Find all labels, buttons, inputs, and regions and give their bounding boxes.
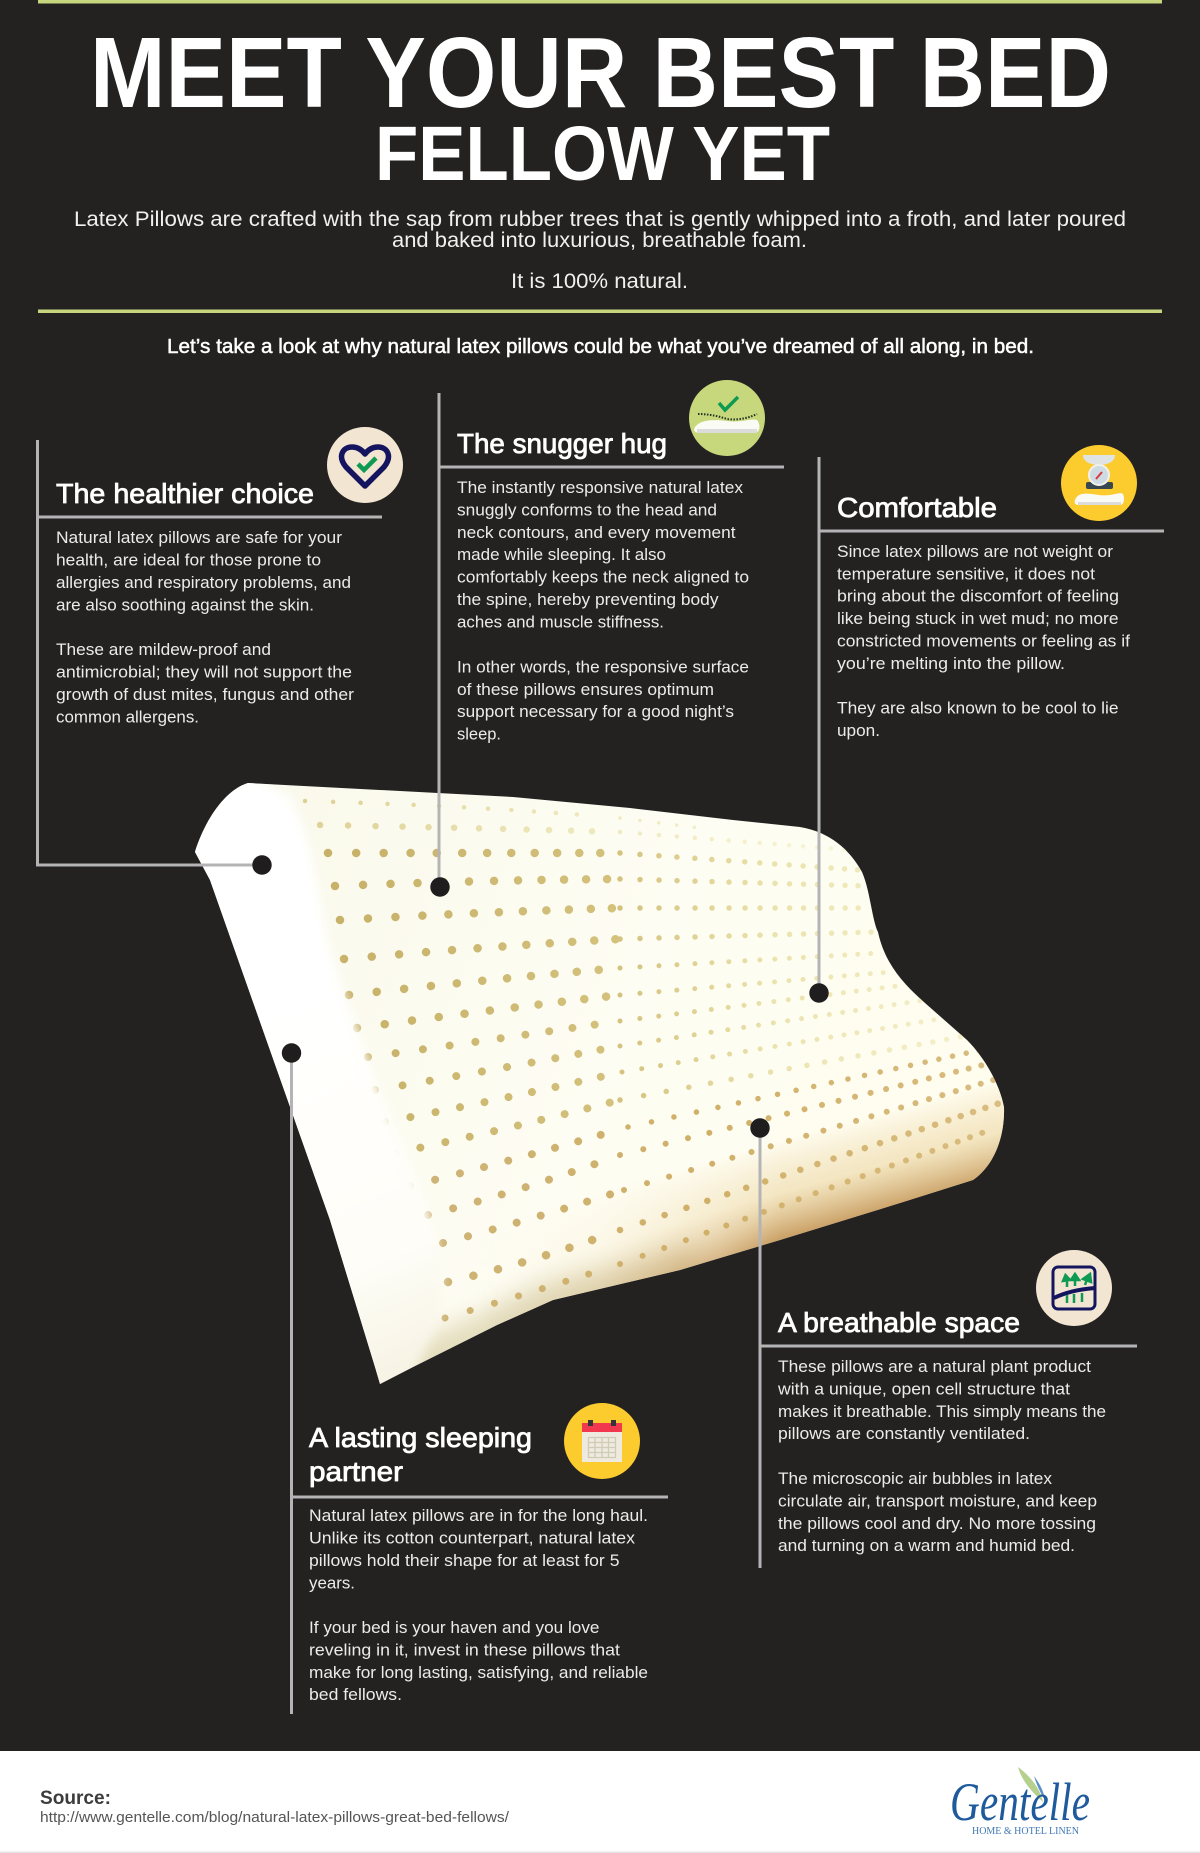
body text: In other words, the responsive surface [457, 658, 749, 676]
body text: The instantly responsive natural latex [457, 478, 744, 497]
body text: the spine, hereby preventing body [457, 590, 719, 609]
body text: with a unique, open cell structure that [777, 1380, 1070, 1398]
body text: pillows hold their shape for at least for 5 [309, 1551, 620, 1570]
panel: the snugger hug [439, 380, 784, 744]
panel: comfortable [819, 445, 1164, 740]
heading: A lasting sleeping [309, 1422, 532, 1453]
body text: pillows are constantly ventilated. [778, 1424, 1030, 1443]
title [90, 17, 1111, 197]
icon: heart with check [327, 427, 403, 503]
body text [309, 1506, 648, 1704]
body text [777, 1357, 1106, 1555]
body text [837, 542, 1130, 740]
body text: health, are ideal for those prone to [56, 550, 321, 570]
body text: made while sleeping. It also [457, 545, 666, 564]
body text: neck contours, and every movement [457, 523, 736, 542]
heading: The snugger hug [457, 428, 667, 459]
body text: upon. [837, 721, 880, 740]
intro text: It is 100% natural. [511, 269, 688, 293]
body text: These are mildew-proof and [56, 640, 271, 659]
leader line: lasting partner [290, 1053, 293, 1714]
intro text: and baked into luxurious, breathable foam. [392, 228, 807, 252]
body text: antimicrobial; they will not support the [56, 662, 352, 682]
body text: aches and muscle stiffness. [457, 612, 664, 632]
body text: temperature sensitive, it does not [837, 564, 1095, 584]
heading [309, 1422, 532, 1487]
body text: Natural latex pillows are safe for your [56, 528, 342, 547]
body text: Natural latex pillows are in for the long haul. [309, 1506, 648, 1525]
heading: Comfortable [837, 492, 997, 523]
leader line: snugger hug [438, 393, 440, 887]
body text: years. [309, 1574, 355, 1592]
title: MEET YOUR BEST BED [90, 17, 1111, 129]
body text: comfortably keeps the neck aligned to [457, 568, 749, 586]
body text [56, 528, 354, 726]
title: FELLOW YET [375, 111, 830, 197]
intro text: Latex Pillows are crafted with the sap from rubber trees that is gently whipped into a froth, and later poured [74, 207, 1126, 231]
body text: These pillows are a natural plant product [778, 1357, 1091, 1376]
source [40, 1788, 510, 1826]
body text: and turning on a warm and humid bed. [778, 1536, 1075, 1555]
source: Source: [40, 1788, 111, 1809]
body text: growth of dust mites, fungus and other [56, 685, 354, 704]
leader line: healthier choice [38, 440, 262, 865]
logo: Gentelle: Gentelle [950, 1772, 1090, 1832]
leader line: comfortable [818, 457, 820, 993]
heading: A breathable space [778, 1307, 1020, 1338]
leader line: breathable space [758, 1128, 762, 1568]
body text [457, 478, 749, 744]
body text: Unlike its cotton counterpart, natural latex [309, 1528, 636, 1548]
body text: The microscopic air bubbles in latex [778, 1469, 1053, 1488]
logo: Gentelle: HOME & HOTEL LINEN [972, 1826, 1079, 1837]
body text: are also soothing against the skin. [56, 596, 314, 614]
body text: snuggly conforms to the head and [457, 500, 717, 520]
pillow illustration [185, 775, 1020, 1400]
body text: allergies and respiratory problems, and [56, 573, 351, 592]
icon: calendar [564, 1403, 640, 1479]
body text: They are also known to be cool to lie [837, 698, 1118, 718]
body text: like being stuck in wet mud; no more [837, 609, 1118, 628]
body text: bring about the discomfort of feeling [837, 586, 1119, 606]
body text: Since latex pillows are not weight or [837, 542, 1113, 561]
panel: a breathable space [760, 1250, 1137, 1555]
subheading: Let’s take a look at why natural latex pillows could be what you’ve dreamed of all along, in bed. [167, 335, 1034, 358]
body text: make for long lasting, satisfying, and reliable [309, 1663, 648, 1682]
panel: a lasting sleeping partner [292, 1403, 668, 1704]
body text: makes it breathable. This simply means the [778, 1402, 1106, 1421]
body text: support necessary for a good night’s [457, 702, 734, 721]
panel: the healthier choice [37, 427, 403, 726]
footer [0, 1751, 1200, 1853]
body text: you’re melting into the pillow. [837, 654, 1065, 673]
icon: airflow [1036, 1250, 1112, 1326]
icon: pillow with check [689, 380, 765, 456]
pillow perforation rows: left half [305, 801, 628, 1318]
body text: sleep. [457, 724, 501, 744]
logo: Gentelle [950, 1767, 1090, 1837]
heading: partner [309, 1456, 403, 1487]
body text: the pillows cool and dry. No more tossing [778, 1514, 1096, 1533]
pillow perforation rows: right half [620, 818, 1000, 1264]
body text: If your bed is your haven and you love [309, 1618, 600, 1637]
heading: The healthier choice [56, 478, 314, 509]
source: http://www.gentelle.com/blog/natural-latex-pillows-great-bed-fellows/ [40, 1810, 510, 1826]
icon: weighing scale on pillow [1061, 445, 1137, 521]
body text: common allergens. [56, 708, 199, 726]
body text: of these pillows ensures optimum [457, 680, 714, 699]
body text: circulate air, transport moisture, and keep [778, 1492, 1097, 1510]
pillow marker dots [252, 855, 829, 1138]
body text: bed fellows. [309, 1685, 402, 1704]
intro text [74, 207, 1126, 293]
body text: reveling in it, invest in these pillows that [309, 1640, 620, 1660]
body text: constricted movements or feeling as if [837, 632, 1130, 650]
